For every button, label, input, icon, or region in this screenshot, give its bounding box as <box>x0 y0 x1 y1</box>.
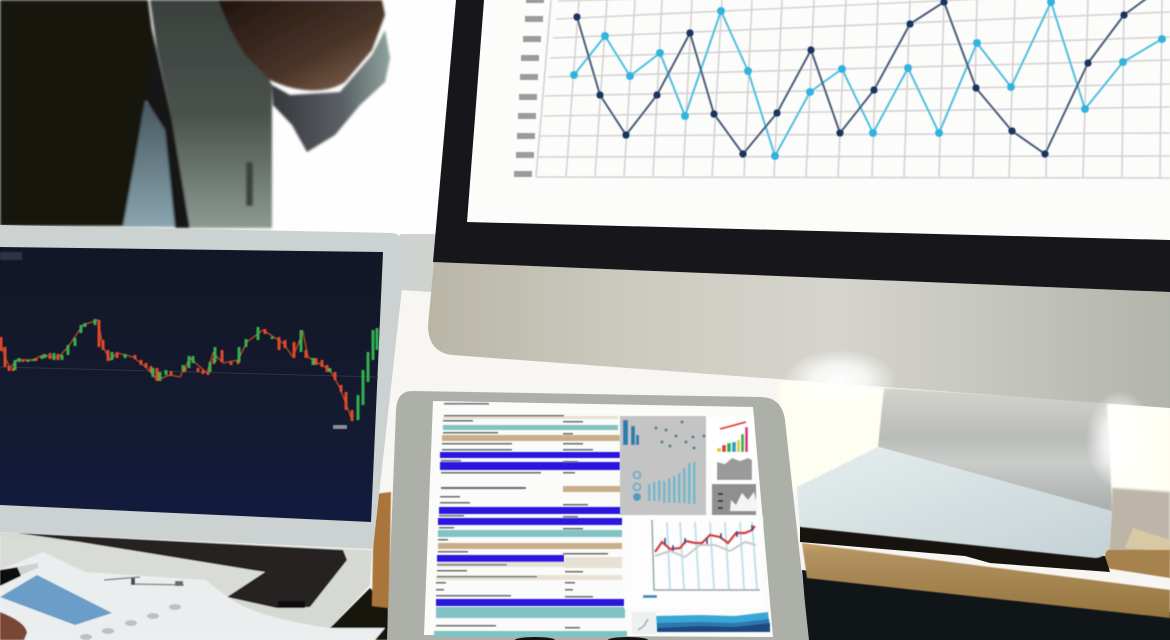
laptop deck <box>0 532 372 640</box>
small icon tile <box>632 612 656 634</box>
circular icons <box>634 472 640 490</box>
line chart <box>514 0 1170 178</box>
person: business man in suit <box>0 0 390 228</box>
dark gap below base <box>800 526 1110 572</box>
keyboard spacebar <box>278 601 305 608</box>
axis tick labels <box>514 0 544 177</box>
jacket pocket slit <box>246 162 253 206</box>
grey area chart <box>712 452 754 486</box>
pen <box>0 567 21 586</box>
colourful bar chart <box>707 417 754 462</box>
dark fold between shirt and jacket <box>146 30 190 228</box>
wooden riser <box>372 492 391 608</box>
baseline rule <box>0 367 378 377</box>
tablet: dashboard device <box>387 391 809 640</box>
black bezel <box>433 0 1170 292</box>
dark desk below shelf <box>802 570 1170 640</box>
area chart strip <box>656 612 770 631</box>
stock panel <box>624 516 763 609</box>
fingertip <box>0 612 27 640</box>
pale rows <box>436 416 622 580</box>
scatter network <box>654 420 706 450</box>
light blue series <box>570 0 1166 160</box>
dashboard charts <box>620 416 770 634</box>
green candles <box>15 319 377 420</box>
cream block on shelf <box>1125 528 1170 552</box>
grey panel <box>620 416 706 515</box>
jacket sleeve <box>272 30 390 152</box>
legend swatch <box>643 595 657 598</box>
silver chin <box>428 262 1170 408</box>
stock axes <box>652 520 760 590</box>
price label <box>333 425 347 429</box>
dark panel chart <box>712 484 756 515</box>
blue rows <box>436 452 625 606</box>
rising bar chart <box>648 462 696 504</box>
teal rows <box>434 425 627 637</box>
glow right of stand <box>1107 405 1170 492</box>
rear wooden slat <box>1105 550 1170 578</box>
tablet body <box>387 391 809 640</box>
shelf backing <box>1108 488 1170 560</box>
monitor: desktop display <box>428 0 1170 640</box>
desk and paperwork beneath laptop <box>0 492 391 640</box>
laptop: trading chart <box>0 225 406 549</box>
candlestick chart <box>0 319 377 421</box>
chart grid <box>536 0 1170 178</box>
black gap beside deck <box>315 588 388 640</box>
tan rows <box>438 435 622 549</box>
hand <box>218 0 385 90</box>
data table rows <box>434 403 627 637</box>
bottom edge shadows <box>515 637 648 640</box>
white screen <box>467 0 1170 240</box>
shirt <box>123 100 178 227</box>
small line sketch <box>104 577 184 586</box>
blue chart block <box>0 575 112 625</box>
trend connector <box>0 320 352 420</box>
left glow under monitor <box>780 380 884 490</box>
keyboard <box>17 533 347 608</box>
light glare on monitor <box>784 350 1154 490</box>
monitor stand neck <box>878 388 1112 512</box>
dark suit <box>0 0 157 226</box>
paper sheet on top <box>0 552 385 640</box>
corner readout <box>0 252 22 260</box>
text lines <box>436 403 608 628</box>
grey-green jacket <box>150 0 272 228</box>
paper sheet under <box>0 537 265 640</box>
grey dots on paper <box>80 604 181 640</box>
tablet screen <box>424 401 773 637</box>
stand base <box>797 447 1112 558</box>
laptop bezel <box>0 225 406 549</box>
stock blue markers <box>664 525 753 551</box>
stock red trend <box>655 526 755 552</box>
wooden shelf <box>802 543 1170 618</box>
red candles <box>1 320 352 421</box>
small bar chart <box>623 420 639 445</box>
stock vertical bands <box>667 522 757 589</box>
laptop screen <box>0 247 383 522</box>
stock grey trend <box>655 542 756 557</box>
navy series <box>573 0 1150 158</box>
